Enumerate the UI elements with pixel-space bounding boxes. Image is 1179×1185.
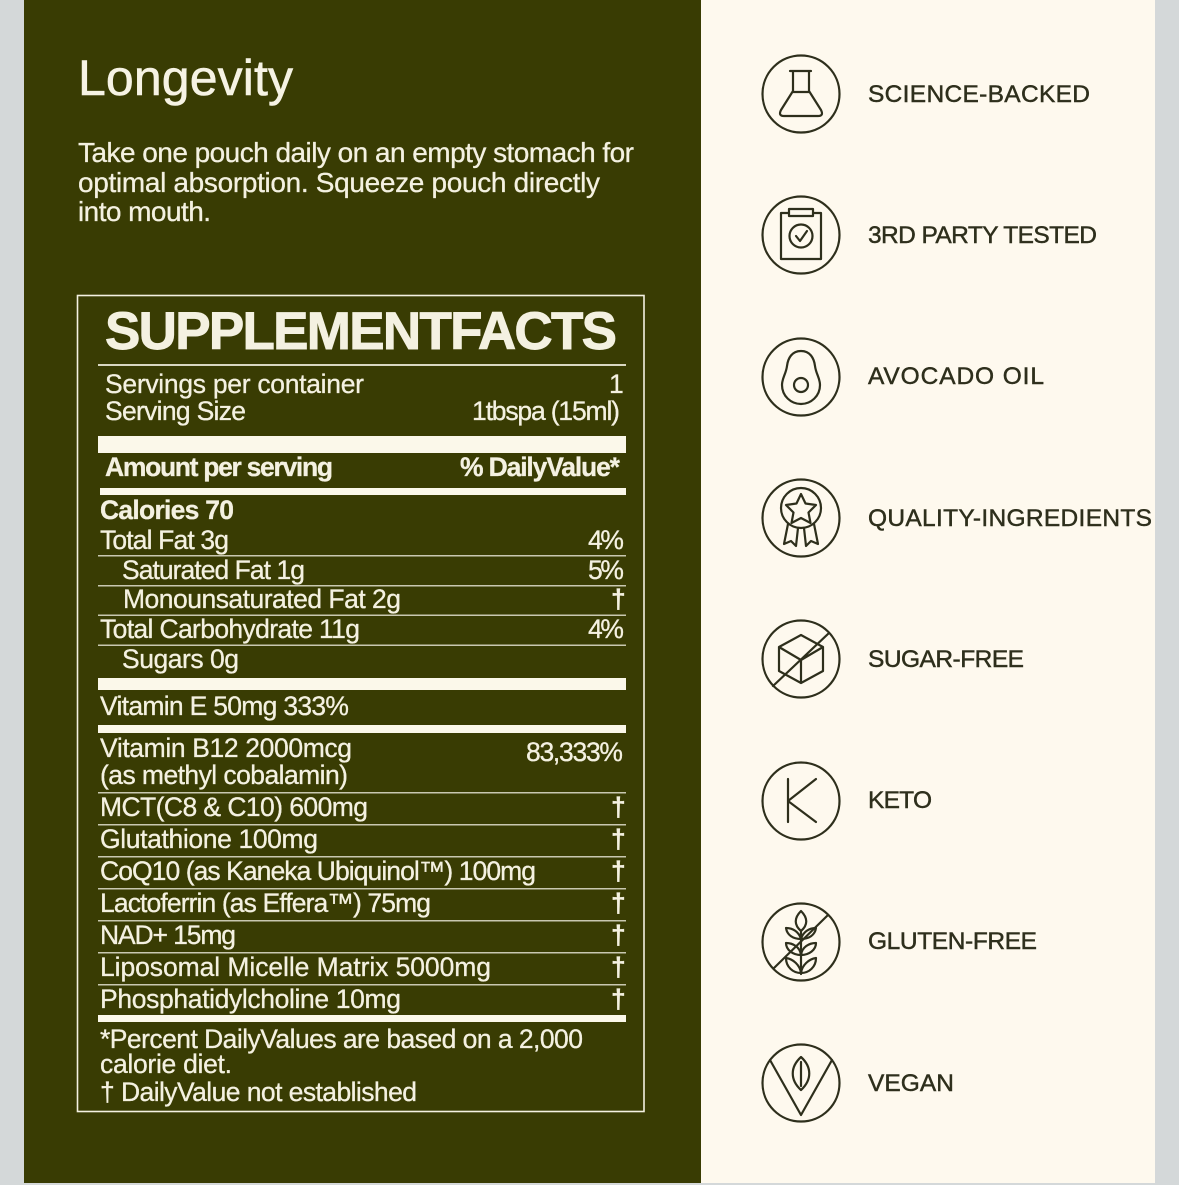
nutrient rows: Saturated Fat 1g	[122, 555, 305, 585]
vitamin rows: (as methyl cobalamin)	[100, 760, 348, 790]
serving information: Servings per container	[105, 369, 364, 399]
title: Longevity	[78, 50, 293, 106]
ingredient rows: †	[611, 952, 626, 982]
footnote: *Percent DailyValues are based on a 2,000	[100, 1024, 583, 1054]
ingredient rows: Phosphatidylcholine 10mg	[100, 984, 401, 1014]
serving information: 1	[609, 369, 624, 399]
claim: quality ingredients: QUALITY-INGREDIENTS	[868, 505, 1152, 532]
serving information: 1tbspa (15ml)	[472, 396, 620, 426]
claim: 3rd party tested: 3RD PARTY TESTED	[868, 222, 1097, 249]
vitamin rows	[98, 678, 626, 794]
nutrient rows: †	[611, 584, 626, 614]
vitamin rows: Vitamin E 50mg 333%	[100, 691, 349, 721]
nutrient rows: Monounsaturated Fat 2g	[123, 584, 401, 614]
nutrient rows: 4%	[588, 525, 624, 555]
claim: keto	[762, 762, 932, 840]
claim: science-backed: SCIENCE-BACKED	[868, 81, 1090, 108]
panel: supplement facts	[78, 296, 644, 1112]
ingredient rows	[98, 792, 626, 1022]
nutrient rows: Sugars 0g	[122, 644, 239, 674]
ingredient rows: CoQ10 (as Kaneka Ubiquinol™) 100mg	[100, 856, 536, 886]
icon: crossed sugar cube	[762, 620, 840, 698]
claim: vegan: VEGAN	[868, 1070, 954, 1097]
ingredient rows: †	[611, 824, 626, 854]
ingredient rows: †	[611, 984, 626, 1014]
claim: sugar-free: SUGAR-FREE	[868, 646, 1024, 673]
icon: crossed wheat	[762, 904, 840, 980]
claim: 3rd party tested	[762, 196, 1097, 274]
serving information	[98, 364, 626, 426]
ingredient rows: MCT(C8 & C10) 600mg	[100, 792, 368, 822]
icon: letter K	[762, 762, 840, 840]
text block: directions: Take one pouch daily on an empty stomach for	[78, 137, 634, 168]
ingredient rows: NAD+ 15mg	[100, 920, 236, 950]
claim: avocado oil	[762, 338, 1044, 416]
ingredient rows: †	[611, 888, 626, 918]
nutrient rows: Total Fat 3g	[100, 525, 229, 555]
nutrient rows	[98, 495, 626, 674]
icon: V with leaf	[762, 1044, 840, 1122]
claim: sugar-free	[762, 620, 1024, 698]
claim: gluten-free: GLUTEN-FREE	[868, 928, 1037, 955]
ingredient rows: Glutathione 100mg	[100, 824, 318, 854]
text block: directions	[78, 137, 634, 227]
ingredient rows: †	[611, 792, 626, 822]
ingredient rows: Lactoferrin (as Effera™) 75mg	[100, 888, 431, 918]
text block: directions: optimal absorption. Squeeze pouch directly	[78, 167, 600, 198]
footnote: calorie diet.	[100, 1049, 232, 1079]
claim: science-backed	[762, 56, 1090, 132]
vitamin rows: Vitamin B12 2000mcg	[100, 733, 352, 763]
claim: quality ingredients	[762, 480, 1152, 556]
nutrient rows: 5%	[588, 555, 624, 585]
ingredient rows: †	[611, 920, 626, 950]
claim: keto: KETO	[868, 787, 932, 814]
nutrient rows: Total Carbohydrate 11g	[100, 614, 360, 644]
ingredient rows: †	[611, 856, 626, 886]
panel: cream claims	[701, 0, 1155, 1183]
text block: directions: into mouth.	[78, 196, 211, 227]
vitamin rows: 83,333%	[526, 737, 623, 767]
ingredient rows: Liposomal Micelle Matrix 5000mg	[100, 952, 491, 982]
amount per serving header: % DailyValue*	[460, 452, 621, 482]
claim: avocado oil: AVOCADO OIL	[868, 363, 1044, 390]
serving information: Serving Size	[105, 396, 246, 426]
heading: supplement facts: SUPPLEMENTFACTS	[105, 302, 617, 361]
icon: flask	[762, 56, 840, 132]
footnote	[100, 1024, 583, 1107]
icon: avocado	[762, 338, 840, 416]
nutrient rows: 4%	[588, 614, 624, 644]
amount per serving header	[98, 436, 626, 495]
nutrient rows: Calories 70	[100, 495, 234, 525]
amount per serving header: Amount per serving	[105, 452, 333, 482]
icon: award ribbon	[762, 480, 840, 556]
claim: vegan	[762, 1044, 954, 1122]
claim: gluten-free	[762, 904, 1037, 980]
icon: clipboard	[762, 196, 840, 274]
footnote: † DailyValue not established	[100, 1077, 417, 1107]
